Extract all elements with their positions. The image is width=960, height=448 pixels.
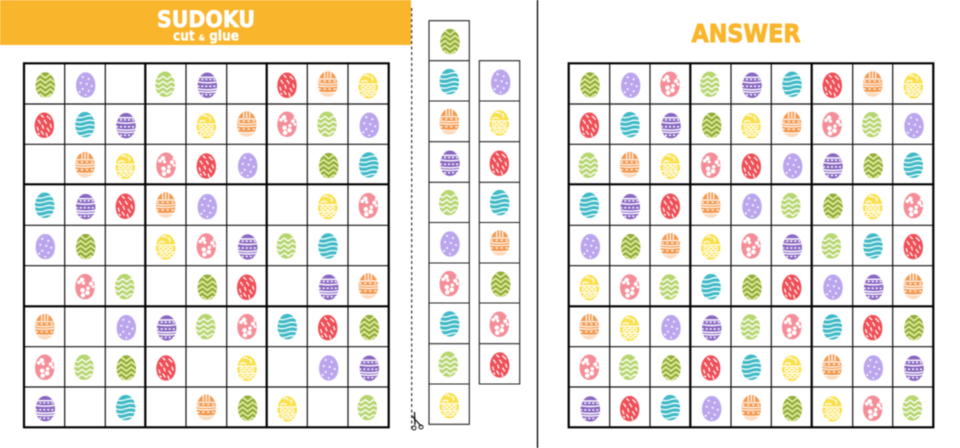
egg: lime bbox=[276, 233, 296, 259]
egg: olive bbox=[823, 193, 843, 219]
cut line bbox=[411, 8, 413, 430]
egg: teal bbox=[75, 112, 95, 138]
egg: purple bbox=[702, 315, 722, 341]
egg: orange bbox=[196, 394, 216, 420]
egg: olive bbox=[238, 395, 258, 421]
egg: yellow bbox=[903, 73, 923, 99]
egg: lime bbox=[821, 233, 841, 259]
egg: orange bbox=[237, 111, 257, 137]
egg: teal bbox=[277, 314, 297, 340]
egg: orange bbox=[358, 273, 378, 299]
egg: teal bbox=[579, 192, 599, 218]
egg: purple bbox=[440, 150, 460, 176]
egg: lilac bbox=[116, 315, 136, 341]
egg: teal bbox=[318, 233, 338, 259]
egg: yellow bbox=[620, 315, 640, 341]
egg: purple bbox=[157, 315, 177, 341]
egg: teal bbox=[440, 311, 460, 337]
egg: pink bbox=[579, 354, 599, 380]
egg: lime bbox=[619, 354, 639, 380]
egg: yellow bbox=[863, 194, 883, 220]
egg: lilac bbox=[863, 355, 883, 381]
egg: pink bbox=[701, 152, 721, 178]
egg: yellow bbox=[318, 194, 338, 220]
egg: pink bbox=[741, 233, 761, 259]
egg: olive bbox=[742, 274, 762, 300]
egg: olive bbox=[863, 153, 883, 179]
egg: lilac bbox=[359, 112, 379, 138]
egg: orange bbox=[490, 230, 510, 256]
egg: olive bbox=[76, 234, 96, 260]
cut-out strip: left bbox=[429, 21, 469, 424]
egg: teal bbox=[620, 112, 640, 138]
title: SUDOKU: SUDOKU bbox=[157, 8, 255, 33]
egg: pink bbox=[237, 314, 257, 340]
egg: lilac bbox=[904, 113, 924, 139]
egg: orange bbox=[156, 192, 176, 218]
egg: teal bbox=[660, 395, 680, 421]
egg: teal bbox=[701, 274, 721, 300]
egg: red bbox=[782, 274, 802, 300]
egg: purple bbox=[742, 72, 762, 98]
egg: purple bbox=[904, 355, 924, 381]
egg: lime bbox=[439, 190, 459, 216]
egg: pink bbox=[863, 395, 883, 421]
egg: red bbox=[620, 396, 640, 422]
egg: pink bbox=[782, 314, 802, 340]
egg: red bbox=[156, 355, 176, 381]
egg: red bbox=[34, 112, 54, 138]
egg: teal bbox=[359, 152, 379, 178]
egg: lilac bbox=[783, 153, 803, 179]
egg: purple bbox=[661, 113, 681, 139]
egg: olive bbox=[580, 72, 600, 98]
egg: olive bbox=[621, 234, 641, 260]
egg: pink bbox=[489, 311, 509, 337]
egg: lilac bbox=[76, 72, 96, 98]
answer grid bbox=[568, 63, 934, 427]
egg: red bbox=[903, 234, 923, 260]
egg: yellow bbox=[489, 110, 509, 136]
egg: yellow bbox=[741, 113, 761, 139]
egg: lime bbox=[196, 314, 216, 340]
heading: ANSWER: ANSWER bbox=[692, 19, 800, 48]
icon: scissors bbox=[412, 412, 423, 430]
egg: yellow bbox=[358, 73, 378, 99]
egg: lime bbox=[740, 314, 760, 340]
egg: lilac bbox=[197, 194, 217, 220]
egg: red bbox=[489, 150, 509, 176]
egg: lime bbox=[155, 71, 175, 97]
egg: lime bbox=[438, 351, 458, 377]
egg: pink bbox=[75, 274, 95, 300]
egg: lilac bbox=[621, 72, 641, 98]
egg: teal bbox=[35, 192, 55, 218]
egg: purple bbox=[359, 355, 379, 381]
egg: yellow bbox=[822, 396, 842, 422]
egg: orange bbox=[318, 71, 338, 97]
egg: teal bbox=[822, 314, 842, 340]
egg: lime bbox=[902, 395, 922, 421]
subtitle: cut and glue: cut & glue bbox=[173, 28, 239, 44]
egg: orange bbox=[75, 152, 95, 178]
egg: yellow bbox=[439, 393, 459, 419]
egg: olive bbox=[359, 315, 379, 341]
egg: lime bbox=[700, 71, 720, 97]
egg: yellow bbox=[579, 275, 599, 301]
egg: orange bbox=[620, 152, 640, 178]
cut-out strip: right bbox=[479, 61, 520, 384]
egg: orange bbox=[903, 273, 923, 299]
egg: orange bbox=[35, 314, 55, 340]
egg: yellow bbox=[660, 153, 680, 179]
egg: purple bbox=[238, 234, 258, 260]
egg: red bbox=[660, 193, 680, 219]
egg: lilac bbox=[238, 153, 258, 179]
egg: teal bbox=[903, 152, 923, 178]
egg: pink bbox=[620, 274, 640, 300]
egg: olive bbox=[319, 153, 339, 179]
egg: red bbox=[490, 352, 510, 378]
egg: red bbox=[115, 193, 135, 219]
egg: pink bbox=[196, 233, 216, 259]
egg: orange bbox=[439, 109, 459, 135]
egg: lime bbox=[659, 274, 679, 300]
egg: yellow bbox=[237, 355, 257, 381]
egg: purple bbox=[782, 234, 802, 260]
egg: teal bbox=[490, 190, 510, 216]
egg: lime bbox=[357, 395, 377, 421]
header banner bbox=[0, 0, 411, 45]
egg: red bbox=[741, 153, 761, 179]
egg: pink bbox=[277, 111, 297, 137]
egg: pink bbox=[358, 193, 378, 219]
egg: purple bbox=[823, 153, 843, 179]
egg: red bbox=[277, 72, 297, 98]
egg: pink bbox=[156, 152, 176, 178]
egg: lilac bbox=[702, 396, 722, 422]
egg: yellow bbox=[782, 355, 802, 381]
egg: purple bbox=[76, 194, 96, 220]
egg: pink bbox=[35, 354, 55, 380]
egg: olive bbox=[782, 396, 802, 422]
egg: lilac bbox=[661, 315, 681, 341]
egg: lilac bbox=[440, 231, 460, 257]
egg: lilac bbox=[35, 234, 55, 260]
egg: purple bbox=[864, 274, 884, 300]
egg: teal bbox=[116, 395, 136, 421]
egg: lime bbox=[862, 112, 882, 138]
egg: orange bbox=[701, 192, 721, 218]
egg: lime bbox=[115, 274, 135, 300]
egg: pink bbox=[660, 71, 680, 97]
egg: purple bbox=[197, 72, 217, 98]
egg: orange bbox=[782, 111, 802, 137]
egg: red bbox=[822, 72, 842, 98]
egg: pink bbox=[439, 271, 459, 297]
egg: olive bbox=[35, 72, 55, 98]
egg: orange bbox=[579, 314, 599, 340]
egg: lilac bbox=[491, 69, 511, 95]
egg: orange bbox=[863, 71, 883, 97]
egg: lime bbox=[578, 152, 598, 178]
egg: red bbox=[196, 153, 216, 179]
egg: olive bbox=[661, 355, 681, 381]
egg: yellow bbox=[196, 113, 216, 139]
egg: lime bbox=[317, 111, 337, 137]
egg: lilac bbox=[823, 274, 843, 300]
egg: yellow bbox=[115, 153, 135, 179]
egg: olive bbox=[116, 355, 136, 381]
egg: red bbox=[237, 274, 257, 300]
egg: teal bbox=[863, 233, 883, 259]
egg: red bbox=[863, 315, 883, 341]
egg: purple bbox=[580, 396, 600, 422]
egg: teal bbox=[782, 71, 802, 97]
egg: lilac bbox=[742, 193, 762, 219]
egg: purple bbox=[116, 113, 136, 139]
egg: olive bbox=[491, 271, 511, 297]
egg: red bbox=[701, 355, 721, 381]
egg: yellow bbox=[156, 234, 176, 260]
egg: teal bbox=[439, 69, 459, 95]
egg: yellow bbox=[277, 396, 297, 422]
egg: pink bbox=[822, 112, 842, 138]
egg: yellow bbox=[701, 234, 721, 260]
egg: lilac bbox=[580, 234, 600, 260]
egg: olive bbox=[197, 274, 217, 300]
egg: red bbox=[318, 315, 338, 341]
egg: lime bbox=[74, 354, 94, 380]
egg: pink bbox=[903, 193, 923, 219]
egg: purple bbox=[35, 396, 55, 422]
egg: lilac bbox=[319, 355, 339, 381]
egg: orange bbox=[822, 354, 842, 380]
egg: orange bbox=[660, 233, 680, 259]
egg: olive bbox=[904, 315, 924, 341]
egg: red bbox=[579, 112, 599, 138]
egg: teal bbox=[741, 354, 761, 380]
egg: olive bbox=[702, 112, 722, 138]
egg: purple bbox=[319, 274, 339, 300]
egg: purple bbox=[620, 194, 640, 220]
egg: orange bbox=[741, 395, 761, 421]
puzzle grid bbox=[24, 63, 389, 427]
page divider bbox=[536, 0, 538, 448]
egg: olive bbox=[440, 29, 460, 55]
egg: lime bbox=[781, 193, 801, 219]
